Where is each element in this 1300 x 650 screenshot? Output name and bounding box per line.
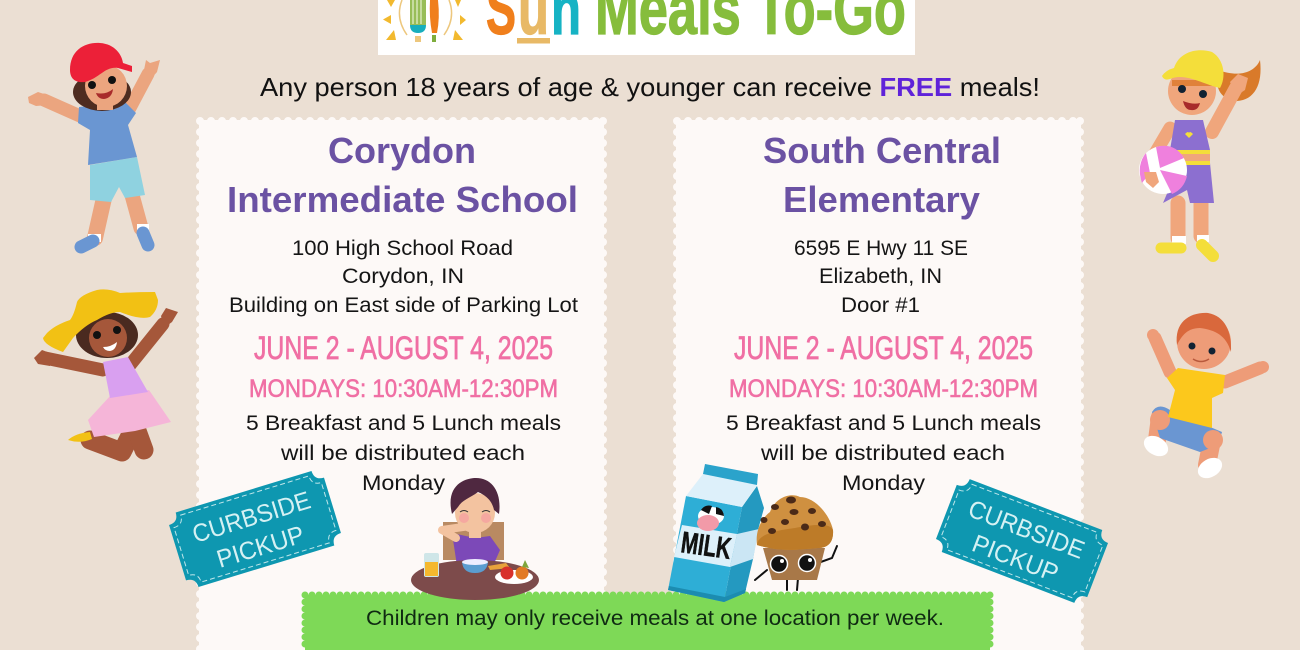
notice text: Children may only receive meals at one location per week. — [366, 607, 944, 630]
hours: MONDAYS: 10:30AM-12:30PM — [729, 375, 1038, 403]
illustration: boy in red cap — [28, 43, 160, 247]
address: Corydon, IN — [342, 265, 464, 288]
address — [794, 237, 968, 317]
address: 6595 E Hwy 11 SE — [794, 237, 968, 260]
illustration: boy in yellow shirt — [1140, 313, 1269, 482]
address: Door #1 — [841, 294, 920, 317]
callout: right curbside pickup ticket: PICKUP — [968, 530, 1062, 588]
heading: South Central: South Central — [763, 130, 1001, 171]
illustration: girl with beach ball — [1139, 50, 1261, 256]
illustration: child eating at table — [411, 478, 539, 600]
panel: Corydon Intermediate School — [199, 120, 604, 650]
callout: right curbside pickup ticket: CURBSIDE — [964, 495, 1088, 565]
meal details: 5 Breakfast and 5 Lunch meals — [246, 412, 561, 435]
panel: South Central Elementary — [676, 120, 1081, 650]
logo banner — [378, 0, 915, 55]
meal details: will be distributed each — [760, 442, 1005, 465]
heading: Corydon: Corydon — [328, 130, 476, 171]
heading: South Central — [763, 130, 1001, 220]
address: Elizabeth, IN — [819, 265, 942, 288]
meal details — [726, 412, 1041, 495]
hours: MONDAYS: 10:30AM-12:30PM — [249, 375, 558, 403]
callout: left curbside pickup ticket: CURBSIDE — [189, 486, 314, 549]
illustration: milk carton — [668, 464, 764, 602]
address — [229, 237, 578, 317]
dates: JUNE 2 - AUGUST 4, 2025 — [734, 330, 1033, 366]
notice banner — [305, 595, 990, 650]
address: 100 High School Road — [292, 237, 513, 260]
meal details: Monday — [362, 472, 446, 495]
dates: JUNE 2 - AUGUST 4, 2025 — [254, 330, 553, 366]
address: Building on East side of Parking Lot — [229, 294, 578, 317]
meal details — [246, 412, 561, 495]
callout: right curbside pickup ticket — [932, 476, 1112, 606]
cow face — [697, 506, 724, 531]
callout: left curbside pickup ticket: PICKUP — [213, 521, 308, 574]
illustration: girl in yellow hat — [34, 289, 178, 452]
tagline: Any person 18 years of age & younger can receive FREE meals! — [260, 72, 1040, 102]
heading: Corydon: Intermediate School — [227, 179, 578, 220]
meal details: 5 Breakfast and 5 Lunch meals — [726, 412, 1041, 435]
heading: Corydon — [227, 130, 578, 220]
illustration: muffin character — [755, 495, 837, 590]
logo wordmark — [486, 0, 906, 50]
logo icon: sun with fork and knife — [383, 0, 466, 42]
milk label: MILK — [679, 526, 733, 566]
heading: South Central: Elementary — [783, 179, 980, 220]
meal details: will be distributed each — [280, 442, 525, 465]
meal details: Monday — [842, 472, 926, 495]
callout: left curbside pickup ticket — [166, 468, 344, 590]
